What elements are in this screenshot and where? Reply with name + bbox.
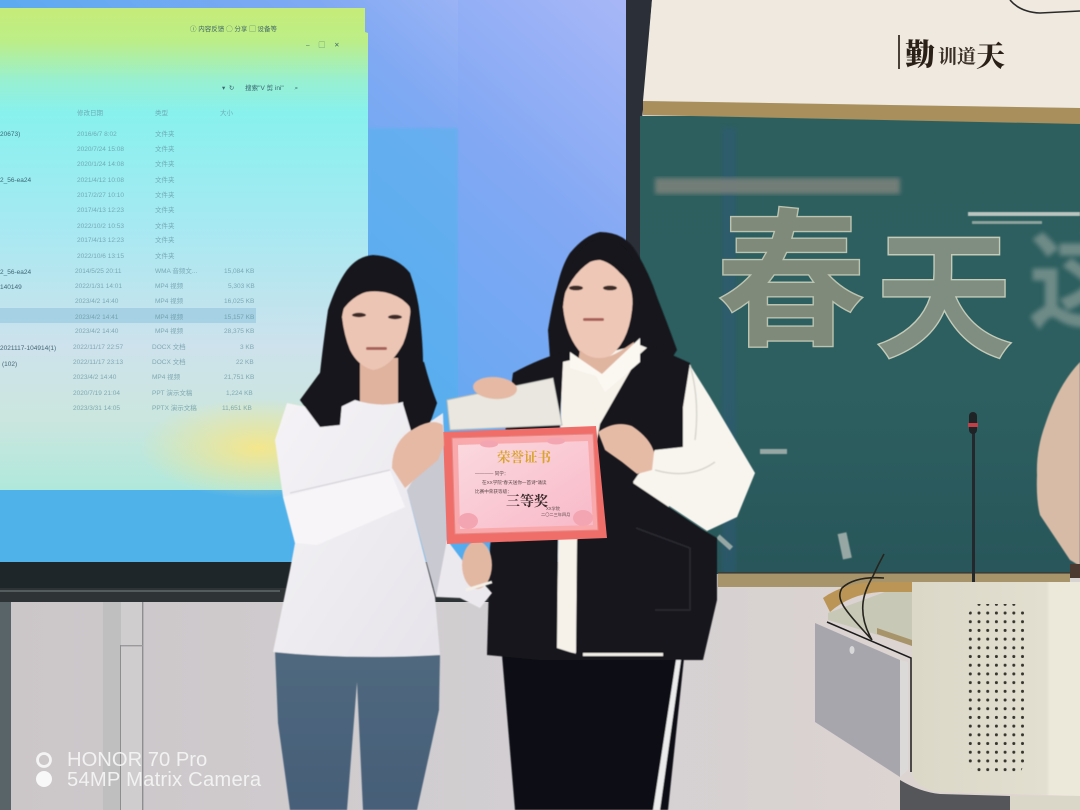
corner ornaments (458, 438, 593, 529)
award certificate: 二〇二三年四月 (541, 511, 570, 518)
file list rows: 5,303 KB (228, 283, 255, 290)
file list rows: 2023/4/2 14:40 (73, 374, 117, 381)
file list rows: 28,375 KB (224, 328, 254, 335)
award certificate: 在XX学院"春天送你一首诗"诵读 (482, 479, 547, 486)
neck (360, 358, 398, 406)
file list rows: 20673) (0, 131, 20, 138)
grey sleeve behind certificate (407, 440, 462, 597)
file list rows: 140149 (0, 284, 22, 291)
certificate heading: 荣誉证书 (497, 446, 551, 466)
file list rows: (102) (2, 361, 17, 368)
file list rows: 2020/7/24 15:08 (77, 146, 124, 153)
certificate body: ———— 同学： (475, 470, 508, 477)
white shirt body (273, 400, 445, 657)
file list rows: 2021117-104914(1) (0, 345, 56, 352)
person at far right edge (1037, 362, 1080, 578)
calligraphy scroll: 道 (957, 42, 976, 69)
file list rows: 文件夹 (155, 175, 175, 184)
file list rows: 2017/4/13 12:23 (77, 207, 124, 214)
file list rows: 文件夹 (155, 190, 175, 199)
hand on folder (472, 375, 518, 401)
search box: ▾ ↻ 搜索"V 剪 ini" ⌕ (222, 83, 298, 92)
upper white panel with calligraphy (643, 0, 1080, 124)
file list rows: 2023/4/2 14:41 (75, 314, 119, 321)
file list rows: 16,025 KB (224, 298, 254, 305)
calligraphy scroll: 勤 (905, 30, 935, 74)
file list rows: 文件夹 (155, 221, 175, 230)
file list rows: 2022/11/17 23:13 (73, 359, 124, 366)
file list rows: DOCX 文档 (152, 357, 186, 366)
lectern base (900, 780, 1010, 810)
sleeve fold (655, 365, 715, 474)
file list rows: 11,651 KB (222, 405, 252, 412)
right hand on certificate (598, 424, 654, 474)
column headings: 类型 (155, 108, 168, 117)
fringe (560, 238, 640, 306)
file list rows: 15,157 KB (224, 314, 254, 321)
lower sleeve cuff (436, 540, 492, 608)
file list rows: 2_56-ea24 (0, 269, 31, 276)
side door panel (815, 623, 900, 777)
file list rows: 2014/5/25 20:11 (75, 268, 122, 275)
right student (487, 232, 755, 810)
column headings (77, 108, 234, 117)
file list rows: 2017/4/13 12:23 (77, 237, 124, 244)
clear folder (447, 378, 562, 430)
window title controls: ⓘ 内容反馈 ◯ 分享 ▢ 设备等 (190, 24, 278, 33)
file list rows: PPT 演示文稿 (152, 388, 193, 397)
file list rows: 2022/10/6 13:15 (77, 253, 124, 260)
file list rows: 2022/10/2 10:53 (77, 223, 124, 230)
file list rows: 2_56-ea24 (0, 177, 31, 184)
file list rows: 15,084 KB (224, 268, 254, 275)
file list rows: 2022/11/17 22:57 (73, 344, 124, 351)
white shirt (556, 345, 690, 654)
file list rows: 2016/6/7 8:02 (77, 131, 117, 138)
camera watermark: 54MP Matrix Camera (67, 769, 262, 791)
right sleeve (633, 365, 755, 531)
projection screen (0, 0, 628, 565)
black trousers (502, 655, 684, 810)
left hand on certificate (392, 422, 444, 488)
face (563, 259, 632, 359)
chalk marks (716, 449, 852, 560)
file list rows: 1,224 KB (226, 390, 253, 397)
chalk characters: sky: 天 (874, 186, 1014, 388)
lower hand (462, 541, 492, 589)
file list rows: 文件夹 (155, 251, 175, 260)
face (342, 291, 410, 370)
facial features (352, 313, 402, 350)
file list rows: MP4 视频 (155, 326, 184, 335)
file list rows: 22 KB (236, 359, 254, 366)
award certificate (443, 426, 607, 544)
file list rows: 文件夹 (155, 205, 175, 214)
lower wall (0, 588, 1080, 810)
watermark text: HONOR 70 Pro (67, 749, 207, 771)
prize level: 三等奖 (506, 491, 548, 511)
calligraphy scroll: 训 (938, 42, 957, 69)
award certificate: 比赛中荣获等级： (475, 488, 512, 495)
watermark dot icon (36, 771, 52, 787)
calligraphy scroll (898, 30, 1005, 75)
lower shirt edge (583, 653, 663, 656)
vest pocket (636, 528, 690, 610)
left student (273, 255, 492, 810)
speaker grille (966, 604, 1028, 775)
hair back (548, 232, 677, 372)
calligraphy scroll: 天 (976, 34, 1005, 75)
file list rows: PPTX 演示文稿 (152, 403, 197, 412)
screen bezel (0, 0, 652, 602)
file list rows: 文件夹 (155, 144, 175, 153)
file list rows: MP4 视频 (155, 281, 184, 290)
file list rows: 2023/4/2 14:40 (75, 298, 119, 305)
file list rows: 2023/4/2 14:40 (75, 328, 119, 335)
lectern body (912, 582, 1080, 796)
file list rows (0, 129, 255, 412)
file list rows: 2020/7/19 21:04 (73, 390, 120, 397)
forearm (283, 470, 405, 545)
watermark ring icon (38, 754, 50, 766)
cables (840, 554, 884, 640)
file list rows: MP4 视频 (155, 296, 184, 305)
lectern (815, 554, 1080, 810)
file list rows: 文件夹 (155, 159, 175, 168)
jeans (275, 650, 440, 810)
file list rows: 2022/1/31 14:01 (75, 283, 122, 290)
file list rows: 文件夹 (155, 235, 175, 244)
fringe (338, 258, 414, 318)
file list rows: 文件夹 (155, 129, 175, 138)
column headings: 大小 (220, 108, 234, 117)
file list rows: DOCX 文档 (152, 342, 186, 351)
file list rows: WMA 音频文... (155, 266, 197, 275)
facial features (569, 286, 617, 321)
blackboard (640, 116, 1080, 587)
file list rows: 2023/3/31 14:05 (73, 405, 120, 412)
file list rows: 3 KB (240, 344, 254, 351)
column headings: 修改日期 (77, 108, 104, 117)
file list rows: MP4 视频 (155, 312, 184, 321)
file list rows: 21,751 KB (224, 374, 254, 381)
window buttons: – ▢ ✕ (306, 41, 340, 49)
trouser stripe (653, 660, 681, 810)
file list rows: MP4 视频 (152, 372, 181, 381)
file list rows: 2017/2/27 10:10 (77, 192, 124, 199)
issuer: XX学院 (546, 505, 561, 512)
ceiling cable (1010, 0, 1080, 13)
neck (578, 342, 634, 378)
camera watermark (36, 749, 262, 791)
file list rows: 2021/4/12 10:08 (77, 177, 124, 184)
microphone (968, 412, 978, 582)
bracelet (466, 582, 492, 590)
black vest (487, 345, 717, 660)
hair back (300, 255, 437, 432)
chalk characters: spring: 春 (716, 161, 866, 378)
file list rows: 2020/1/24 14:08 (77, 161, 124, 168)
hair over shoulders (300, 360, 437, 434)
collar (570, 338, 640, 392)
file explorer window (0, 8, 376, 498)
